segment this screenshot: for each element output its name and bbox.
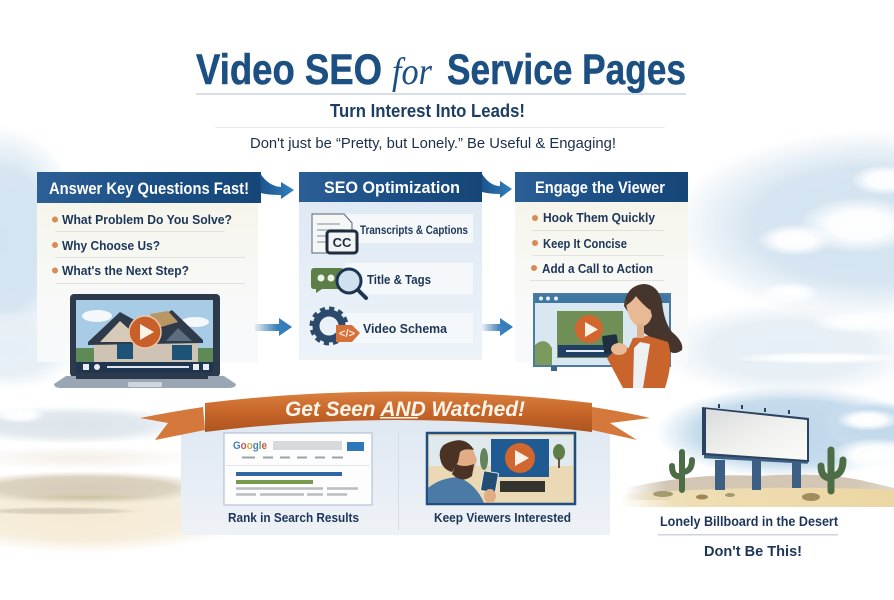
title: Service Pages bbox=[447, 46, 686, 94]
engagement list: Hook Them Quickly bbox=[543, 210, 656, 225]
illustration: woman with phone bbox=[602, 284, 682, 388]
icon: speech bubble and magnifier bbox=[311, 268, 366, 298]
illustration: man with tablet bbox=[428, 440, 499, 503]
google search card bbox=[224, 433, 372, 505]
engagement list: Add a Call to Action bbox=[542, 261, 653, 276]
title: for bbox=[392, 51, 432, 93]
icon: document with CC: CC bbox=[333, 235, 352, 250]
cactus left bbox=[672, 452, 692, 490]
panel header: SEO Optimization bbox=[324, 178, 460, 197]
arrow: laptop to panel 2 bbox=[255, 318, 292, 336]
video viewer card bbox=[427, 433, 575, 504]
arrow: panel 2 to panel 3, bottom bbox=[482, 318, 513, 336]
caption: rank in search results: Rank in Search Results bbox=[228, 510, 359, 525]
illustration: lonely billboard in the desert bbox=[620, 386, 894, 507]
icon: play button bbox=[129, 316, 161, 348]
row: transcripts and captions: Transcripts & Captions bbox=[360, 223, 468, 237]
engagement list: Keep It Concise bbox=[543, 236, 627, 251]
panel: results bbox=[181, 420, 610, 535]
banner text: Get Seen AND Watched! bbox=[285, 398, 525, 421]
billboard board bbox=[702, 404, 809, 464]
subtitle: Turn Interest Into Leads! bbox=[330, 101, 525, 121]
arrow: panel 1 to panel 2, top bbox=[260, 173, 294, 199]
panel header: Engage the Viewer bbox=[535, 178, 665, 197]
tagline: Don't just be “Pretty, but Lonely.” Be Useful & Engaging! bbox=[250, 135, 616, 152]
icon: laptop with house video bbox=[54, 294, 236, 388]
icon: play button bbox=[505, 443, 535, 473]
panel header bbox=[515, 172, 688, 202]
question list: What Problem Do You Solve? bbox=[62, 212, 232, 227]
icon: gear with code tag: </> bbox=[339, 328, 355, 340]
ribbon banner bbox=[140, 392, 650, 440]
cactus right bbox=[821, 450, 843, 491]
title: Video SEO bbox=[196, 46, 382, 94]
panel: SEO optimization bbox=[299, 172, 482, 360]
google search card: Google bbox=[233, 440, 267, 452]
row: transcripts and captions bbox=[312, 214, 473, 253]
row: video schema: Video Schema bbox=[363, 321, 448, 336]
question list bbox=[52, 212, 245, 284]
row: video schema bbox=[312, 309, 473, 343]
panel header bbox=[37, 172, 261, 203]
icon: document with CC bbox=[312, 214, 357, 253]
row: title and tags bbox=[311, 263, 473, 298]
engagement list bbox=[530, 210, 664, 281]
caption: keep viewers interested: Keep Viewers Interested bbox=[434, 510, 571, 525]
question list: Why Choose Us? bbox=[62, 238, 160, 253]
panel header bbox=[299, 172, 482, 202]
icon: play button bbox=[575, 315, 603, 343]
arrow: panel 2 to panel 3, top bbox=[482, 174, 512, 198]
billboard legs bbox=[715, 460, 801, 490]
title bbox=[196, 46, 686, 94]
panel header: Answer Key Questions Fast! bbox=[49, 179, 249, 198]
icon: browser window with video bbox=[534, 294, 670, 371]
billboard caption: Lonely Billboard in the Desert bbox=[660, 514, 838, 529]
warning: don't be this: Don't Be This! bbox=[704, 543, 802, 560]
question list: What's the Next Step? bbox=[62, 263, 189, 278]
panel: engage the viewer bbox=[515, 172, 688, 388]
row: title and tags: Title & Tags bbox=[367, 272, 431, 287]
panel: answer key questions bbox=[37, 172, 261, 388]
icon: gear with code tag bbox=[312, 309, 360, 343]
